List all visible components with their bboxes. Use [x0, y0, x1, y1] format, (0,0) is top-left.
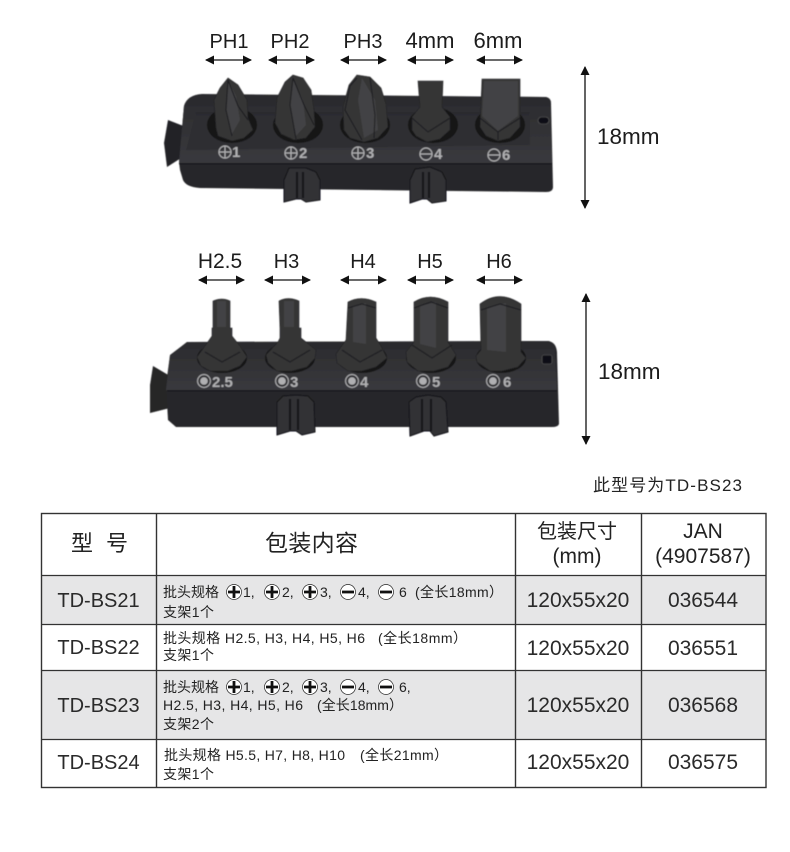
- row: TD-BS22: 036551: [668, 637, 738, 660]
- hex bit facets: [217, 301, 506, 352]
- top size labels and arrows: [206, 28, 522, 60]
- top product: screwdriver bit holder: [164, 75, 553, 203]
- row: TD-BS23: 1,: [243, 679, 255, 695]
- bottom size labels and arrows: [198, 250, 522, 280]
- row: TD-BS23: 批头规格: [163, 679, 219, 695]
- row: TD-BS23: 4,: [358, 679, 370, 695]
- top height dimension: 18mm: [597, 124, 660, 149]
- bottom size labels and arrows: H5: [417, 251, 443, 273]
- top size labels and arrows: PH3: [344, 31, 382, 53]
- top holder body: [179, 94, 553, 192]
- row: TD-BS21: 批头规格: [163, 584, 219, 600]
- bottom holder markings: 2.5: [212, 374, 233, 391]
- bottom product: hex bit holder: [150, 296, 559, 436]
- bottom holder markings: [198, 374, 511, 391]
- row: TD-BS23: [57, 679, 738, 732]
- row: TD-BS21: 支架1个: [163, 604, 214, 620]
- top holder left clip: [164, 120, 186, 167]
- top size labels and arrows: PH1: [210, 31, 248, 53]
- hex bit edges: [205, 302, 521, 362]
- table header: JAN: [683, 520, 723, 543]
- row: TD-BS24: 036575: [668, 751, 738, 774]
- Phillips and slotted bits: [214, 75, 520, 142]
- table header: 包装内容: [265, 530, 358, 556]
- bit ridges: [226, 78, 520, 140]
- row: TD-BS24: 支架1个: [163, 766, 214, 782]
- row: TD-BS23: 036568: [668, 694, 738, 717]
- row: TD-BS21: 6: [399, 584, 407, 600]
- bottom holder markings: 3: [290, 374, 298, 391]
- row: TD-BS24: (全长21mm）: [360, 747, 448, 763]
- row: TD-BS21: 120x55x20: [527, 589, 629, 612]
- top holder clips: [284, 167, 446, 203]
- row: TD-BS22: TD-BS22: [57, 637, 140, 659]
- row: TD-BS22: [57, 630, 738, 663]
- bottom height dimension: 18mm: [598, 359, 661, 384]
- top holder markings: [219, 144, 510, 164]
- row: TD-BS22: 支架1个: [163, 647, 214, 663]
- top holder markings: 6: [502, 147, 510, 164]
- bottom holder sockets: [197, 343, 526, 373]
- bottom holder body: [166, 341, 559, 427]
- row: TD-BS24: 120x55x20: [527, 751, 629, 774]
- bit highlights: [226, 78, 518, 138]
- row: TD-BS21: 2,: [282, 584, 294, 600]
- top size labels and arrows: PH2: [271, 31, 309, 53]
- table row shading: [42, 576, 766, 739]
- row: TD-BS24: TD-BS24: [57, 752, 140, 774]
- bottom size labels and arrows: H6: [486, 251, 512, 273]
- hex bits: [197, 296, 526, 371]
- row: TD-BS23: 支架2个: [163, 716, 214, 732]
- top holder markings: 2: [299, 145, 307, 162]
- table grid: [41, 513, 766, 788]
- row: TD-BS22: 120x55x20: [527, 637, 629, 660]
- top holder sockets: [207, 107, 525, 143]
- row: TD-BS23: 3,: [320, 679, 332, 695]
- bottom size labels and arrows: H2.5: [198, 250, 242, 273]
- table header: 包装尺寸: [537, 520, 617, 543]
- table header: (mm): [553, 545, 601, 568]
- row: TD-BS21: 1,: [243, 584, 255, 600]
- top holder markings: 3: [366, 145, 374, 162]
- row: TD-BS21: 4,: [358, 584, 370, 600]
- top holder markings: 1: [232, 144, 240, 161]
- row: TD-BS21: [57, 584, 738, 620]
- row: TD-BS21: (全长18mm）: [415, 584, 503, 600]
- bottom size labels and arrows: H3: [274, 251, 299, 273]
- bottom holder markings: 6: [503, 374, 511, 391]
- row: TD-BS24: 批头规格 H5.5, H7, H8, H10: [164, 747, 345, 763]
- table header: (4907587): [655, 545, 751, 568]
- row: TD-BS21: 036544: [668, 589, 738, 612]
- bottom size labels and arrows: H4: [350, 251, 376, 273]
- table header: [71, 520, 751, 568]
- specification table: [41, 513, 766, 788]
- row: TD-BS23: 120x55x20: [527, 694, 629, 717]
- table header: 型 号: [71, 531, 128, 556]
- top size labels and arrows: 6mm: [474, 28, 522, 53]
- bottom holder markings: 5: [432, 374, 440, 391]
- row: TD-BS23: H2.5, H3, H4, H5, H6: [163, 697, 303, 713]
- bottom holder left clip: [150, 366, 170, 413]
- top holder markings: 4: [434, 146, 443, 163]
- row: TD-BS22: 批头规格 H2.5, H3, H4, H5, H6: [163, 630, 365, 646]
- row: TD-BS21: 3,: [320, 584, 332, 600]
- row: TD-BS21: TD-BS21: [57, 590, 140, 612]
- row: TD-BS23: TD-BS23: [57, 695, 140, 717]
- row: TD-BS23: 6,: [399, 679, 411, 695]
- bottom holder markings: 4: [360, 374, 369, 391]
- top size labels and arrows: 4mm: [406, 28, 454, 53]
- row: TD-BS23: 2,: [282, 679, 294, 695]
- row: TD-BS22: (全长18mm）: [378, 630, 467, 646]
- row: TD-BS24: [57, 747, 738, 782]
- row: TD-BS23: (全长18mm）: [317, 697, 403, 713]
- model note: 此型号为TD-BS23: [593, 476, 742, 495]
- bottom holder clips: [277, 395, 448, 436]
